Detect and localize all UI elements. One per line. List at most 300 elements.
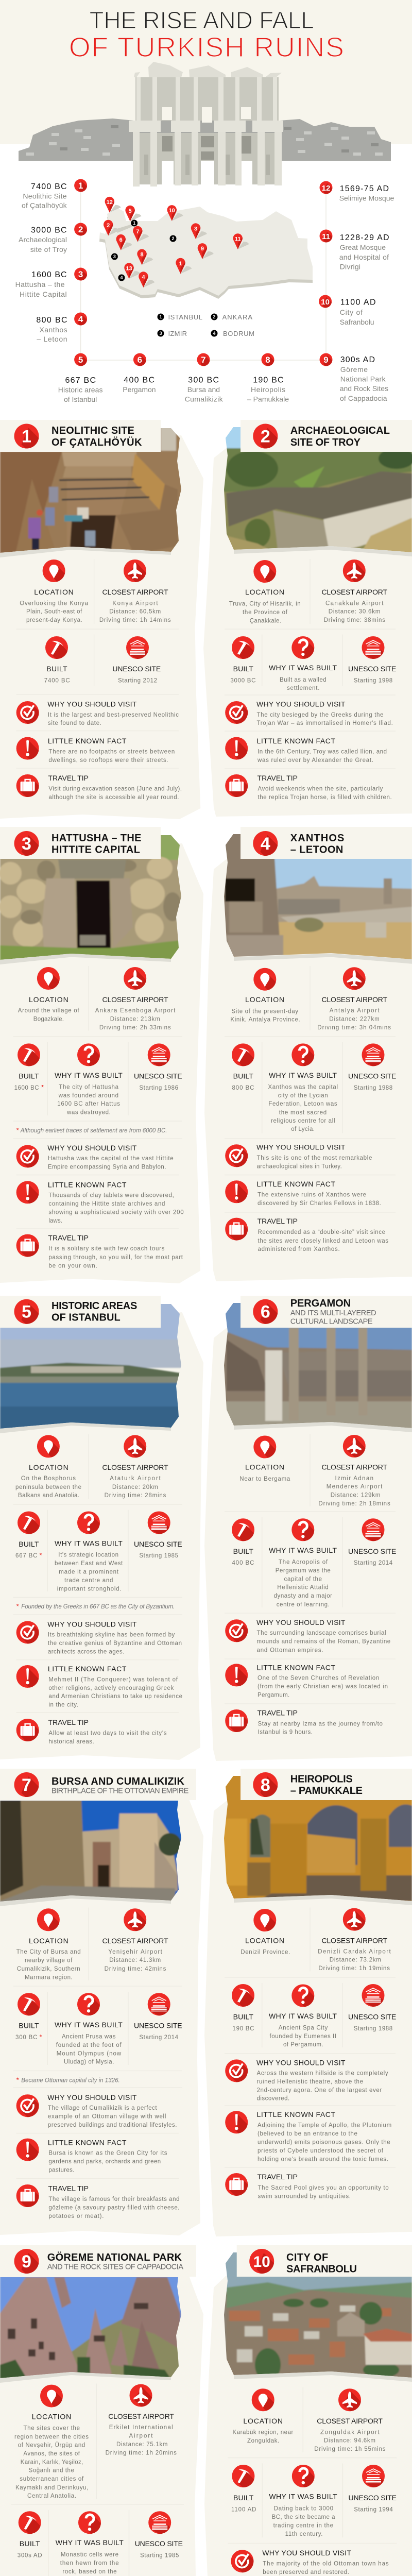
number badge: 1	[22, 427, 31, 446]
location block: Kaymaklı and Derinkuyu,	[15, 2485, 88, 2491]
travel tip block	[16, 2184, 180, 2219]
why visit block: WHY YOU SHOULD VISIT	[256, 2058, 346, 2066]
timeline connector lines	[81, 185, 326, 360]
built block: BUILT	[233, 2494, 254, 2502]
location block	[241, 1909, 290, 1956]
number badge: 6	[261, 1302, 270, 1322]
closest airport block	[314, 2388, 386, 2452]
travel tip block: TRAVEL TIP	[258, 1708, 298, 1717]
location block: subterranean cities of	[20, 2476, 84, 2482]
closest airport block: CLOSEST AIRPORT	[102, 995, 168, 1004]
why built block: Hellenistic Attalid	[277, 1585, 329, 1591]
timeline item 7: 300 BC	[188, 376, 219, 384]
timeline item 12: Selimiye Mosque	[339, 194, 394, 202]
built block: BUILT	[20, 2539, 40, 2548]
number badge: 4	[261, 834, 270, 854]
why visit block	[16, 2093, 177, 2128]
why visit block	[225, 700, 393, 726]
timeline: bottom row	[58, 353, 289, 403]
location block: LOCATION	[245, 995, 284, 1004]
built block	[18, 2511, 43, 2559]
location block: LOCATION	[29, 1463, 68, 1471]
why built block	[56, 2511, 124, 2576]
location block	[230, 968, 300, 1023]
card heading: SITE OF TROY	[290, 437, 361, 448]
panel: card 7 Bursa	[0, 1769, 203, 2235]
built block: 1600 BC	[14, 1085, 39, 1091]
why built block: It's strategic location	[58, 1552, 118, 1558]
travel tip block	[16, 1234, 183, 1269]
fact block: showing a sophisticated society with over 200	[48, 1210, 184, 1216]
why built block: made it a prominent	[59, 1569, 119, 1575]
unesco block: Starting 2014	[354, 1560, 393, 1566]
location block: Cumalikizik, Southern	[17, 1966, 80, 1972]
map pins: 12	[107, 199, 113, 206]
timeline item 11: and Hospital of	[339, 253, 389, 261]
why built block: Federation, Letoon was	[268, 1101, 337, 1107]
footnote: *	[16, 2076, 19, 2084]
timeline item 10: Safranbolu	[340, 318, 374, 326]
built block	[232, 1984, 256, 2032]
card heading	[52, 1300, 137, 1324]
travel tip block: It is a solitary site with few coach tours	[48, 1246, 165, 1252]
why visit block: site found to date.	[48, 720, 101, 726]
illustration: ruined walls and library of Celsus	[19, 62, 391, 187]
photo: Bosphorus skyline	[0, 1301, 185, 1434]
location block: Site of the present-day	[232, 1009, 298, 1015]
number badge	[253, 831, 281, 859]
built block: 300 BC	[15, 2035, 37, 2041]
why built block: Uludag) of Mysia.	[64, 2059, 114, 2065]
panel: card 3 Hattusha	[0, 827, 203, 1283]
unesco block: UNESCO SITE	[348, 1547, 396, 1555]
card heading	[290, 425, 390, 448]
location block	[239, 1435, 290, 1482]
card heading: CULTURAL LANDSCAPE	[290, 1318, 373, 1326]
fact block: and Armenian Christians to take up residence	[48, 1693, 182, 1700]
map legend: 2	[213, 314, 216, 319]
fact block: LITTLE KNOWN FACT	[48, 1665, 127, 1673]
panel: card 9 Goreme	[0, 2245, 203, 2576]
number badge	[14, 423, 42, 451]
unesco block: UNESCO SITE	[348, 2012, 396, 2021]
why visit block: WHY YOU SHOULD VISIT	[47, 1144, 137, 1152]
fact block	[225, 737, 387, 764]
built block: *	[39, 2033, 42, 2041]
closest airport block: Driving time: 1h 20mins	[106, 2450, 177, 2456]
closest airport block	[95, 967, 176, 1031]
card heading: CITY OF	[286, 2252, 328, 2263]
city marker numbers: 2	[171, 236, 175, 241]
card heading	[52, 425, 142, 448]
timeline item 4: 800 BC	[36, 316, 67, 325]
why built block: dynasty and a major	[274, 1593, 332, 1599]
timeline item 4	[36, 313, 89, 343]
location block: nearby village of	[25, 1958, 73, 1964]
why visit block: It is the largest and best-preserved Neolithic	[48, 712, 179, 718]
why built block: was founded around	[58, 1093, 118, 1099]
timeline: right column	[319, 181, 394, 402]
travel tip block: TRAVEL TIP	[48, 1718, 89, 1726]
why visit block: The majority of the old Ottoman town has	[263, 2561, 389, 2567]
built block: 300s AD	[18, 2553, 42, 2559]
why visit block: archaeological sites in Turkey.	[256, 1163, 342, 1170]
travel tip block: TRAVEL TIP	[48, 2184, 89, 2193]
travel tip block: the sites were closely linked and Letoon was	[258, 1238, 388, 1244]
timeline item 5: 5	[78, 355, 83, 365]
card heading: ARCHAEOLOGICAL	[290, 425, 390, 436]
closest airport block: Driving time: 1h 19mins	[318, 1965, 390, 1972]
closest airport block: Driving time: 3h 04mins	[317, 1025, 391, 1031]
fact block: LITTLE KNOWN FACT	[256, 2110, 335, 2119]
travel tip block	[225, 1708, 383, 1736]
number badge	[14, 1299, 42, 1327]
card heading: GÖREME NATIONAL PARK	[47, 2251, 182, 2263]
fact block: (from the early Christian era) was located in	[258, 1684, 388, 1690]
closest airport block: Canakkale Airport	[325, 600, 384, 606]
built block: 7400 BC	[44, 678, 70, 684]
closest airport block: Driving time: 1h 55mins	[314, 2446, 386, 2452]
timeline item 11: 1228-29 AD	[340, 233, 389, 242]
location block: Central Anatolia.	[27, 2493, 76, 2499]
location block: Marmara region.	[25, 1974, 73, 1980]
travel tip block: gözleme (a savoury pastry filled with cheese,	[48, 2205, 180, 2211]
map pins: 6	[119, 237, 123, 243]
closest airport block	[318, 1908, 391, 1972]
panel: card 5 Istanbul	[0, 1296, 203, 1760]
why built block: 1600 BC after Hattus	[57, 1101, 120, 1107]
unesco block: Starting 2012	[118, 678, 157, 684]
why visit block: This site is one of the most remarkable	[256, 1155, 372, 1161]
why visit block: been preserved and restored.	[263, 2569, 349, 2575]
timeline item 8: 190 BC	[253, 376, 283, 384]
travel tip block: historical areas.	[48, 1739, 94, 1745]
why built block: of Lycia.	[291, 1126, 315, 1132]
why visit block	[16, 1620, 182, 1655]
location block	[14, 2385, 89, 2499]
timeline item 11: 11	[322, 232, 330, 241]
map legend: ISTANBUL	[168, 313, 202, 321]
closest airport block: Driving time: 1h 14mins	[99, 617, 171, 623]
fact block: containing the Hittite state archives and	[48, 1201, 165, 1207]
timeline item 4: – Letoon	[37, 335, 67, 343]
travel tip block: The village is famous for their breakfasts and	[48, 2196, 180, 2202]
location block: Balkans and Anatolia.	[18, 1493, 79, 1499]
fact block: LITTLE KNOWN FACT	[48, 2138, 127, 2146]
timeline item 2	[19, 223, 89, 253]
fact block	[16, 1181, 184, 1224]
closest airport block: Zonguldak Airport	[320, 2429, 380, 2435]
why built block	[269, 2465, 337, 2537]
number badge	[14, 831, 42, 859]
why built block	[55, 1043, 123, 1116]
fact block	[225, 1180, 381, 1207]
why built block	[55, 1512, 123, 1592]
why built block: important stronghold.	[57, 1586, 122, 1592]
location block: of Nevşehir, Ürgüp and	[18, 2442, 85, 2448]
unesco block	[348, 636, 396, 684]
location block: Avanos, the sites of	[23, 2451, 80, 2457]
card header	[241, 1296, 412, 1328]
unesco block: UNESCO SITE	[348, 665, 396, 673]
card heading	[52, 833, 141, 855]
location block: Kinik, Antalya Province.	[230, 1017, 300, 1023]
why visit block: WHY YOU SHOULD VISIT	[256, 1143, 346, 1151]
timeline item 5: 667 BC	[65, 376, 96, 385]
location block: The sites cover the	[23, 2426, 80, 2432]
closest airport block: CLOSEST AIRPORT	[321, 995, 387, 1004]
timeline item 3: Hattusha – the	[15, 280, 65, 289]
timeline item 3: Hittite Capital	[20, 290, 67, 298]
closest airport block	[317, 967, 391, 1031]
location block: LOCATION	[245, 588, 284, 596]
closest airport block: Denizli Cardak Airport	[318, 1948, 391, 1955]
travel tip block: TRAVEL TIP	[258, 2173, 298, 2181]
why built block: 11th century.	[285, 2531, 322, 2537]
fact block	[225, 2110, 391, 2162]
travel tip block	[225, 1217, 388, 1252]
timeline item 11: Divrigi	[340, 263, 360, 271]
built block: 3000 BC	[230, 678, 255, 684]
number badge	[14, 1772, 42, 1800]
timeline item 1	[22, 179, 89, 210]
why visit block	[16, 700, 179, 726]
timeline item 6	[123, 353, 156, 394]
location block	[20, 560, 89, 623]
travel tip block: although the site is accessible all year round.	[48, 794, 179, 801]
why built block: trading centre in the	[273, 2522, 333, 2529]
closest airport block: Distance: 129km	[331, 1493, 380, 1499]
timeline item 5: Historic areas	[58, 385, 103, 394]
travel tip block: passing through, so you will, for the most part	[48, 1255, 183, 1261]
timeline item 7	[185, 353, 224, 403]
travel tip block: the replica Trojan horse, is filled with children.	[258, 794, 392, 801]
card heading: HISTORIC AREAS	[52, 1300, 137, 1312]
timeline item 2: site of Troy	[30, 245, 67, 253]
location block: Around the village of	[18, 1008, 79, 1014]
card heading: HATTUSHA – THE	[52, 833, 141, 844]
unesco block	[348, 2465, 397, 2513]
fact block: LITTLE KNOWN FACT	[256, 1664, 335, 1672]
built block: 800 BC	[232, 1085, 254, 1091]
timeline item 10: 1100 AD	[340, 298, 376, 307]
built block	[232, 1518, 256, 1566]
timeline item 9: National Park	[340, 375, 386, 383]
city marker numbers: 1	[133, 221, 135, 226]
why visit block: The city besieged by the Greeks during the	[256, 712, 383, 718]
location block: LOCATION	[243, 2417, 283, 2425]
fact block: was ruled over by Alexander the Great.	[257, 757, 373, 764]
why visit block: The village of Cumalikizik is a perfect	[48, 2105, 157, 2111]
map legend: ANKARA	[222, 313, 252, 321]
fact block: gardens and parks, orchards and green	[48, 2159, 161, 2165]
map legend: 3	[159, 331, 162, 336]
timeline item 10: 10	[321, 298, 330, 307]
timeline item 11: Great Mosque	[340, 243, 386, 251]
timeline item 12: 1569-75 AD	[340, 184, 389, 193]
closest airport block: Distance: 227km	[329, 1016, 380, 1023]
why visit block: mounds and remains of the Roman, Byzantine	[256, 1639, 390, 1645]
card header	[0, 1296, 161, 1328]
number badge: 5	[22, 1302, 31, 1322]
built block: 1100 AD	[231, 2507, 256, 2513]
closest airport block: Distance: 73.2km	[330, 1957, 381, 1963]
closest airport block	[99, 560, 171, 623]
timeline item 1: 7400 BC	[31, 182, 67, 191]
card header	[0, 420, 161, 452]
card heading	[290, 1298, 376, 1326]
closest airport block: CLOSEST AIRPORT	[102, 1937, 168, 1945]
timeline item 10: City of	[340, 308, 363, 316]
map pins: 11	[235, 236, 241, 242]
timeline: left column	[15, 179, 89, 343]
title	[69, 7, 344, 63]
fact block	[16, 1665, 182, 1708]
card header	[0, 2245, 196, 2277]
location block: Çanakkale.	[250, 618, 281, 624]
closest airport block: CLOSEST AIRPORT	[108, 2412, 174, 2420]
photo: Bursa fortress	[0, 1798, 185, 1906]
location block: present-day Konya.	[26, 617, 82, 623]
why built block: trade centre and	[64, 1578, 113, 1584]
why built block: rock, based on the	[62, 2569, 116, 2575]
closest airport block: Yenişehir Airport	[108, 1949, 163, 1955]
location block	[15, 1435, 81, 1499]
number badge: 3	[22, 834, 31, 854]
why visit block: example of an Ottoman village with well	[48, 2113, 166, 2120]
unesco block	[348, 1518, 396, 1566]
why visit block: and Ottoman empires.	[256, 1647, 323, 1653]
number badge	[253, 1299, 281, 1327]
number badge: 9	[22, 2252, 31, 2272]
card heading: SAFRANBOLU	[286, 2264, 357, 2275]
number badge: 7	[22, 1775, 31, 1795]
card heading: OF ÇATALHÖYÜK	[52, 436, 142, 448]
travel tip block: potatoes or meat).	[48, 2213, 104, 2219]
timeline item 7: Bursa and	[187, 385, 220, 394]
travel tip block	[16, 1718, 167, 1745]
unesco block	[112, 636, 161, 684]
city marker numbers: 4	[120, 275, 123, 280]
why built block: WHY IT WAS BUILT	[55, 1539, 123, 1547]
photo: Safranbolu town	[221, 2250, 412, 2381]
timeline item 7: Cumalikizik	[185, 395, 224, 403]
closest airport block: Distance: 41.3km	[109, 1957, 161, 1963]
travel tip block: Recommended as a “double-site” visit since	[258, 1229, 385, 1235]
timeline item 3: 1600 BC	[31, 270, 67, 279]
timeline item 6: 6	[138, 355, 142, 365]
why built block: religious centre for all	[271, 1118, 335, 1124]
card header	[237, 2245, 412, 2277]
location block: Bogazkale.	[33, 1016, 64, 1023]
why visit block: WHY YOU SHOULD VISIT	[256, 700, 346, 708]
fact block: The extensive ruins of Xanthos were	[258, 1192, 366, 1198]
built block: *	[41, 1083, 44, 1091]
why built block: founded at the foot of	[56, 2042, 122, 2048]
why built block: WHY IT WAS BUILT	[269, 1546, 337, 1554]
why built block: WHY IT WAS BUILT	[55, 2021, 123, 2029]
number badge: 8	[261, 1775, 270, 1795]
built block: BUILT	[233, 2012, 253, 2021]
map pins: 9	[201, 246, 204, 252]
timeline item 11	[320, 230, 389, 271]
why built block	[269, 1985, 337, 2048]
closest airport block: CLOSEST AIRPORT	[102, 588, 168, 596]
built block: BUILT	[19, 2022, 39, 2030]
closest airport block	[102, 1435, 168, 1499]
closest airport block: Distance: 94.6km	[324, 2438, 375, 2444]
why built block: was destroyed.	[66, 1110, 111, 1116]
built block: 400 BC	[232, 1560, 254, 1566]
why built block: WHY IT WAS BUILT	[56, 2538, 124, 2547]
card heading: – PAMUKKALE	[290, 1785, 363, 1797]
card heading	[47, 2251, 183, 2272]
why built block: the most sacred	[279, 1110, 327, 1116]
travel tip block: TRAVEL TIP	[48, 774, 89, 782]
why built block: Xanthos was the capital	[268, 1084, 338, 1090]
fact block: Thousands of clay tablets were discovered,	[48, 1193, 174, 1199]
why visit block	[225, 1618, 390, 1653]
location block: LOCATION	[34, 588, 74, 596]
header background	[0, 0, 412, 144]
why built block: WHY IT WAS BUILT	[269, 2493, 337, 2501]
number badge	[14, 2249, 42, 2277]
fact block: pastures.	[48, 2167, 74, 2173]
why visit block: The surrounding landscape comprises burial	[256, 1630, 386, 1636]
travel tip block: be on your own.	[48, 1263, 97, 1269]
card heading: OF ISTANBUL	[52, 1312, 121, 1324]
built block: BUILT	[233, 1072, 253, 1080]
unesco block: UNESCO SITE	[348, 1072, 396, 1080]
built block	[230, 636, 256, 684]
panel: card 8 Heiropolis	[204, 1769, 412, 2236]
card heading	[290, 833, 344, 855]
why visit block: Across the western hillside is the completely	[256, 2070, 388, 2076]
map legend: 1	[159, 314, 162, 319]
why visit block: preserved buildings and traditional lifestyles.	[48, 2122, 177, 2128]
travel tip block: Avoid weekends when the site, particularly	[258, 786, 383, 792]
travel tip block: The Sacred Pool gives you an opportunity to	[258, 2185, 389, 2191]
travel tip block: Istanbul is 9 hours.	[258, 1730, 313, 1736]
number badge: 2	[261, 427, 270, 446]
photo: stone gate	[0, 832, 185, 963]
timeline item 4: Xanthos	[39, 326, 67, 334]
closest airport block	[106, 2384, 177, 2456]
timeline item 7: 7	[201, 355, 206, 365]
timeline item 2: 3000 BC	[31, 226, 67, 235]
map pins	[104, 197, 249, 287]
why built block: founded by Eumenes II	[270, 2033, 336, 2040]
fact block: laws.	[48, 1218, 62, 1224]
why visit block: WHY YOU SHOULD VISIT	[256, 1618, 346, 1626]
city marker numbers	[113, 221, 175, 280]
closest airport block: CLOSEST AIRPORT	[321, 1937, 387, 1945]
why visit block: WHY YOU SHOULD VISIT	[47, 2093, 137, 2102]
card heading	[290, 1774, 363, 1797]
card heading: AND ITS MULTI-LAYERED	[290, 1309, 376, 1317]
number badge: 10	[253, 2253, 270, 2270]
timeline item 2: Archaeological	[19, 235, 67, 244]
map pins: 10	[169, 208, 175, 214]
built block: BUILT	[19, 1072, 39, 1080]
fact block: One of the Seven Churches of Revelation	[258, 1675, 379, 1682]
card header	[241, 420, 412, 452]
timeline item 8: 8	[265, 355, 270, 365]
closest airport block	[318, 1435, 390, 1507]
fact block: LITTLE KNOWN FACT	[48, 1181, 127, 1189]
closest airport block: Driving time: 42mins	[105, 1966, 166, 1972]
footnote: *	[16, 1602, 19, 1610]
